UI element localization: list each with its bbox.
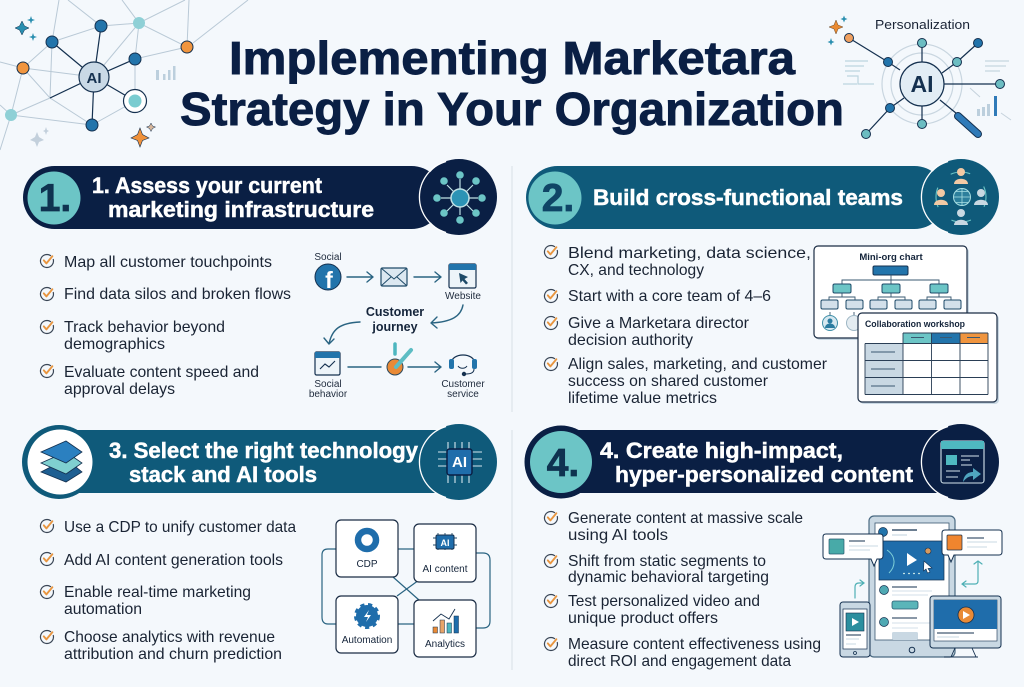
checklist 4: Generate content at massive scale [568, 510, 803, 527]
checklist 1: Evaluate content speed and [64, 364, 259, 381]
checklist 4 [544, 510, 821, 670]
diagram: multi-device personalized content [823, 516, 1002, 657]
box: CDP [336, 520, 398, 577]
box: Analytics: Analytics [425, 639, 465, 650]
node: AI center [900, 62, 944, 106]
diagram: customer journey: behavior [309, 389, 348, 400]
label: customer journey: Customer [366, 305, 424, 319]
box: AI content: AI [440, 538, 450, 548]
device: monitor [930, 596, 1001, 657]
icon: hub network [433, 171, 486, 224]
box: CDP: CDP [356, 559, 378, 570]
header bar 1: 1. Assess your current [92, 173, 322, 198]
checklist 1: approval delays [64, 381, 175, 398]
header bar 1: 1. [39, 177, 71, 220]
header bar 3: stack and AI tools [129, 462, 317, 487]
icon: AI chip [438, 442, 482, 483]
checklist 1: Find data silos and broken flows [64, 286, 291, 303]
checklist 3: automation [64, 601, 142, 618]
checklist 3 [40, 519, 296, 663]
header bar 2: 2. [542, 177, 574, 220]
header bar 1: marketing infrastructure [108, 197, 374, 222]
checklist 2: Give a Marketara director [568, 315, 750, 332]
icon: email [381, 268, 407, 286]
box: Analytics [414, 600, 476, 657]
label: customer journey: journey [371, 320, 418, 334]
diagram: collaboration workshop [858, 313, 999, 404]
title: Strategy in Your Organization [180, 83, 844, 135]
checklist 2: CX, and technology [568, 262, 704, 279]
diagram: customer journey: service [447, 389, 479, 400]
node: AI hub: AI [86, 70, 102, 87]
decoration: Personalization AI network top right [828, 16, 1011, 138]
diagram: technology stack [322, 520, 490, 657]
diagram: customer journey: Social [314, 379, 342, 390]
panel 1 [23, 159, 497, 400]
header bar 1 [23, 159, 497, 235]
checklist 2: Blend marketing, data science, [568, 245, 811, 262]
diagram: mini-org chart [814, 246, 969, 340]
checklist 2: lifetime value metrics [568, 390, 717, 407]
arrow: phone to tablet [855, 580, 864, 598]
checklist 3: attribution and churn prediction [64, 646, 282, 663]
icon: magnifier handle [958, 116, 978, 134]
checklist 2: Align sales, marketing, and customer [568, 356, 828, 373]
panel 3 [22, 424, 497, 663]
label: customer journey [366, 305, 424, 334]
icon: headset [449, 355, 477, 376]
header bar 4: hyper-personalized content [615, 462, 914, 487]
checklist 3: Enable real-time marketing [64, 584, 251, 601]
checklist 4: dynamic behavioral targeting [568, 569, 769, 586]
diagram: customer journey: Customer [441, 379, 485, 390]
diagram: mini-org chart: Mini-org chart [859, 252, 923, 263]
box: Automation [336, 596, 398, 653]
node: AI center: AI [910, 71, 934, 97]
checklist 4: Shift from static segments to [568, 553, 766, 570]
box: AI content [414, 524, 476, 582]
header bar 2: Build cross-functional teams [593, 185, 903, 210]
checklist 2: Start with a core team of 4–6 [568, 288, 771, 305]
checklist 2 [544, 245, 828, 407]
checklist 4: direct ROI and engagement data [568, 653, 791, 670]
divider lines [511, 166, 513, 670]
icon: facebook: f [325, 267, 333, 293]
device: tablet [869, 516, 955, 657]
icon: AI chip: AI [452, 454, 467, 471]
checklist 4: Test personalized video and [568, 593, 760, 610]
box: Automation: Automation [342, 635, 392, 646]
diagram: collaboration workshop: Collaboration workshop [865, 319, 965, 330]
panel 2 [526, 159, 999, 407]
arrow: bubble to monitor [962, 561, 982, 587]
checklist 4: Measure content effectiveness using [568, 636, 821, 653]
box: AI content: AI content [422, 564, 468, 575]
diagram: customer journey: Social [314, 252, 342, 263]
header bar 4 [524, 424, 999, 500]
checklist 4: using AI tools [568, 527, 668, 544]
checklist 4: unique product offers [568, 610, 718, 627]
decoration: Personalization AI network top right: Personalization [875, 18, 970, 32]
title: Implementing Marketara [229, 32, 795, 84]
header bar 4: 4. [547, 442, 579, 485]
header bar 3: 3. Select the right technology [109, 438, 418, 463]
diagram: customer journey [309, 252, 485, 400]
checklist 2: decision authority [568, 332, 693, 349]
checklist 3: Add AI content generation tools [64, 552, 283, 569]
icon: facebook [315, 264, 341, 293]
bubble: orange product [942, 530, 1002, 562]
checklist 1: demographics [64, 336, 165, 353]
panel 4 [524, 424, 1002, 670]
decoration: AI network top left [0, 0, 248, 150]
header bar 4: 4. Create high-impact, [600, 438, 843, 463]
icon: website [449, 264, 476, 288]
device: phone [840, 602, 870, 657]
checklist 3: Choose analytics with revenue [64, 629, 275, 646]
icon: team around globe [934, 168, 988, 225]
checklist 3: Use a CDP to unify customer data [64, 519, 296, 536]
checklist 1: Map all customer touchpoints [64, 254, 272, 271]
header bar 2 [526, 159, 999, 235]
checklist 2: success on shared customer [568, 373, 769, 390]
title [180, 32, 844, 135]
icon: web content share [941, 441, 984, 483]
header bar 3 [22, 424, 497, 500]
bubble: teal product [823, 534, 883, 566]
checklist 1 [40, 254, 291, 398]
icon: touchpoint [387, 344, 411, 375]
icon: layers [41, 441, 82, 482]
diagram: customer journey: Website [445, 291, 481, 302]
icon: social behavior [315, 352, 340, 375]
node: AI hub [79, 62, 109, 92]
checklist 1: Track behavior beyond [64, 319, 225, 336]
